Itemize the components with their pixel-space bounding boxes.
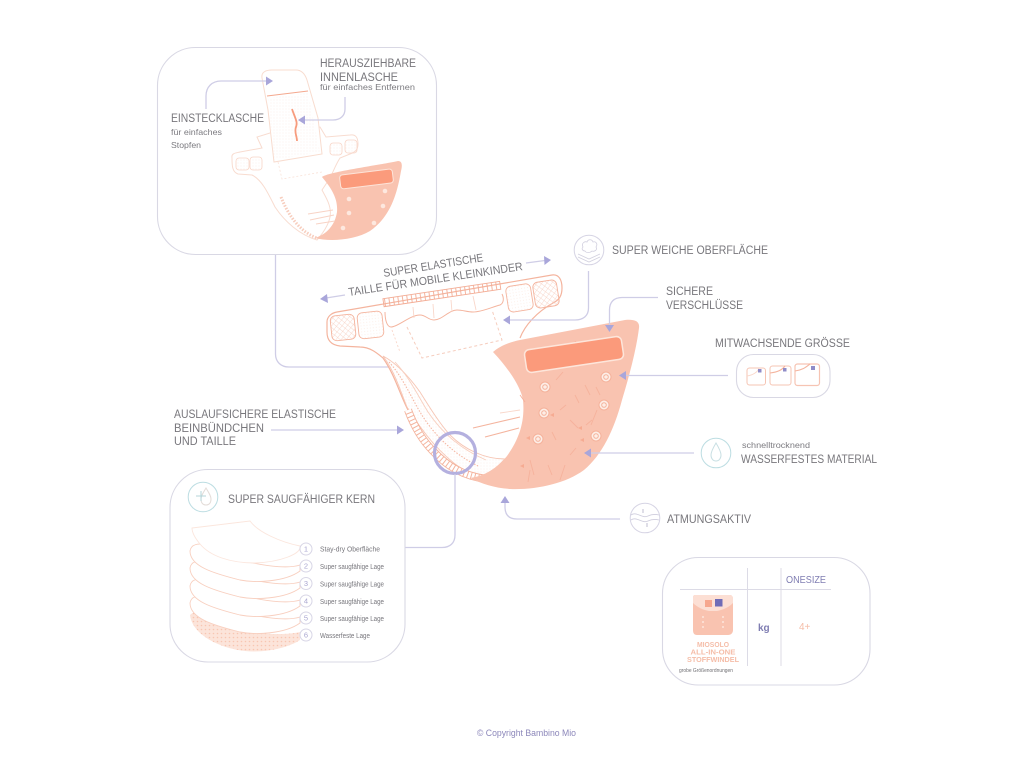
waist ruffle [385,294,503,327]
legend: Super saugfähige Lage [320,564,384,571]
text: secure closures: SICHERE [666,286,713,298]
layer 2 [190,544,300,581]
legend: Super saugfähige Lage [320,582,384,588]
legend: 6 [304,630,308,640]
waist elastic ribs [383,281,501,307]
inset diaper illustration [232,70,402,240]
legend: 4 [304,596,308,606]
icon: diaper [693,595,733,635]
arrow: inner tab [298,97,345,124]
legend [300,543,384,641]
arrow: waist right [526,256,551,265]
text: leakproof elastics: AUSLAUFSICHERE ELASTISCHE [174,409,336,421]
text: insert pocket: Stopfen [171,140,201,150]
text: secure closures [666,286,743,312]
layer stack [190,521,300,651]
text: waterproof: schnelltrocknend [742,440,810,450]
icon: medium size [770,366,791,385]
legend: Stay-dry Oberfläche [320,546,380,554]
legend: 1 [304,544,308,554]
arrow: waist left [320,294,345,303]
value: 4+: 4+ [799,622,811,633]
leg elastic ribs [408,410,487,479]
panel: absorbent core [170,470,405,662]
text: stretchy waist: TAILLE FÜR MOBILE KLEINKINDER [348,261,524,299]
arrow: adjustable size [619,371,728,380]
snaps [533,372,611,444]
legend: 5 [304,614,308,622]
diaper back and waistband [327,275,562,410]
arrow: panel to main diaper [276,255,433,372]
panel: adjustable size [736,354,830,398]
panel: size table [662,558,870,685]
legend: 3 [304,579,308,588]
product name: STOFFWINDEL [687,657,740,664]
text: leakproof elastics: UND TAILLE [174,436,236,448]
text: soft surface: SUPER WEICHE OBERFLÄCHE [612,245,768,257]
copyright: © Copyright Bambino Mio [477,728,576,738]
text: removable tab [320,58,416,92]
fastening strip [524,336,624,373]
wing panels [330,279,560,341]
legend: Super saugfähige Lage [320,599,384,606]
diaper front [470,320,639,489]
legend: 2 [304,562,308,570]
layer 1 [192,521,300,563]
column heading: onesize: ONESIZE [786,575,826,586]
layer 5 [190,596,300,633]
product name: MIOSOLO [697,642,730,649]
text: waterproof [741,440,878,466]
legend: Wasserfeste Lage [320,633,370,640]
arrow: leakproof elastics [271,426,404,434]
text: waterproof: WASSERFESTES MATERIAL [741,454,878,466]
text: adjustable size: MITWACHSENDE GRÖSSE [715,338,850,350]
icon: large size [795,364,820,386]
panel: insert pocket [158,48,436,254]
unit: kg: kg [758,623,770,634]
text: stretchy waist: SUPER ELASTISCHE [383,252,485,280]
icon: small size [747,368,766,385]
text: removable tab: INNENLASCHE [320,72,398,84]
leg gusset [383,356,520,477]
text: secure closures: VERSCHLÜSSE [666,300,743,312]
dashed inner panel [407,310,502,358]
legend: Super saugfähige Lage [320,616,384,623]
layer 6 [190,612,300,651]
product name: ALL-IN-ONE [690,650,736,656]
text: leakproof elastics: BEINBÜNDCHEN [174,423,264,435]
arrow: secure closures [605,298,658,332]
text: breathable: ATMUNGSAKTIV [667,514,751,526]
arrow: soft surface [503,271,588,324]
arrow: insert pocket [206,76,273,109]
icon: breathable [630,503,660,533]
magnifier circle [434,432,476,474]
heading: absorbent core: SUPER SAUGFÄHIGER KERN [228,494,375,506]
layer 4 [190,579,300,616]
connector: magnifier to core [405,474,455,548]
text: removable tab: HERAUSZIEHBARE [320,58,416,70]
arrow: breathable [500,496,620,519]
arrow: waterproof [584,448,694,458]
icon: water drop [701,438,731,468]
text: leakproof elastics [174,409,336,448]
icon: absorbent drop [188,482,218,512]
layer 3 [190,561,300,598]
text: removable tab: für einfaches Entfernen [320,82,415,92]
text: insert pocket: EINSTECKLASCHE [171,113,264,125]
text: insert pocket [171,113,264,150]
text: insert pocket: für einfaches [171,127,222,137]
product name [687,642,740,664]
icon: soft surface [574,235,604,265]
note: approximate sizing: grobe Größenordnungen [679,668,733,674]
main diaper illustration [327,275,639,489]
